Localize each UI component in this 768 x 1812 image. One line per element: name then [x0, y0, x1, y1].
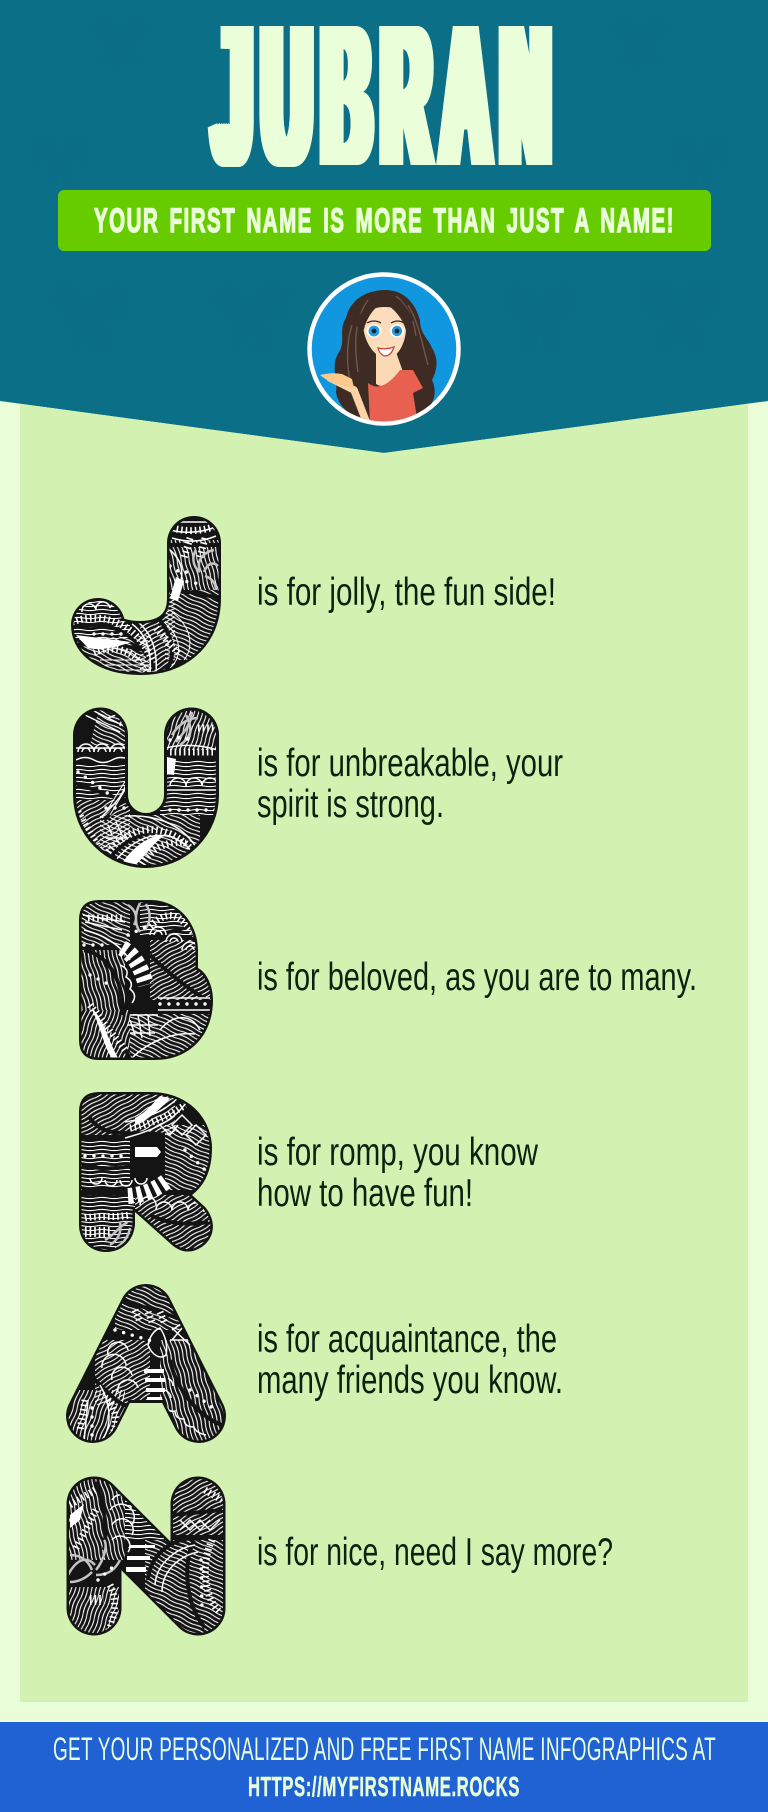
text: R line 2: how to have fun! — [257, 1172, 473, 1215]
letter U illustration — [70, 705, 225, 870]
face — [364, 307, 406, 354]
text: A line 2: many friends you know. — [257, 1359, 563, 1402]
text: U line 2: spirit is strong. — [257, 783, 444, 826]
letter N illustration — [66, 1476, 226, 1640]
text: U line 1: is for unbreakable, your — [257, 742, 563, 785]
footer line 2: HTTPS://MYFIRSTNAME.ROCKS — [248, 1771, 520, 1802]
banner — [58, 190, 711, 251]
text: A line 1: is for acquaintance, the — [257, 1318, 557, 1361]
text: R line 1: is for romp, you know — [257, 1131, 539, 1174]
text: N line: is for nice, need I say more? — [257, 1531, 613, 1574]
letter R illustration — [79, 1092, 215, 1255]
shirt — [368, 370, 423, 424]
letter B illustration — [79, 900, 215, 1060]
hair — [335, 290, 436, 420]
content panel — [20, 404, 748, 1702]
eyes — [366, 324, 382, 338]
letter J illustration — [65, 522, 225, 680]
text: J line: is for jolly, the fun side! — [257, 571, 556, 614]
footer — [0, 1722, 768, 1812]
header background — [0, 0, 768, 453]
letter A illustration — [66, 1284, 225, 1445]
avatar — [310, 274, 458, 424]
smile — [378, 347, 394, 356]
arm — [330, 378, 366, 421]
neck — [376, 352, 403, 386]
